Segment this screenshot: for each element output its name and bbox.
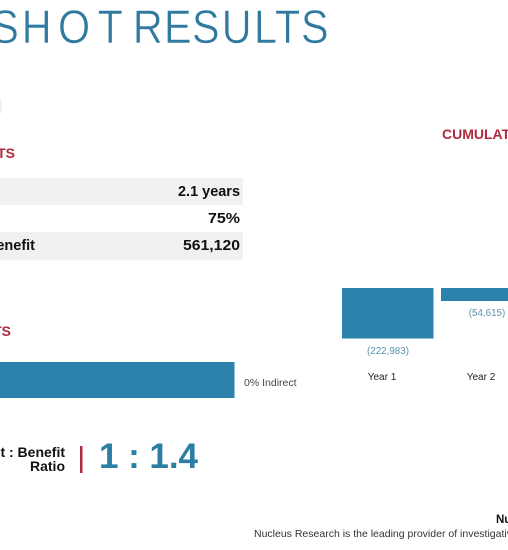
bar: direct benefits (0, 362, 234, 398)
table row: payback (0, 178, 243, 205)
footer (254, 514, 508, 540)
bar: year 1 (342, 288, 434, 338)
table row: ROI: 75% (208, 211, 240, 227)
value: year 2: (54,615) (469, 308, 505, 319)
table row: benefit: 561,120 (183, 238, 240, 254)
cost to benefit label: t : Benefit (0, 444, 65, 460)
chart: cumulative net benefit (342, 288, 508, 383)
divider: ratio (80, 446, 82, 473)
bar: year 2 (441, 288, 508, 301)
bar label: indirect: 0% Indirect (244, 377, 297, 389)
cost to benefit label: Ratio (30, 458, 65, 474)
table row: payback: 2.1 years (178, 184, 240, 200)
axis label: year 2: Year 2 (467, 372, 496, 383)
ratio value: 1 : 1.4 (99, 437, 199, 476)
cost to benefit label (0, 444, 65, 474)
panel: results table (0, 178, 243, 260)
axis label: year 1: Year 1 (368, 372, 397, 383)
clipped heading fragment (0, 100, 2, 113)
table row: benefit (0, 232, 243, 260)
title: SHOT RESULTS (0, 2, 329, 54)
value: year 1: (222,983) (367, 346, 409, 357)
